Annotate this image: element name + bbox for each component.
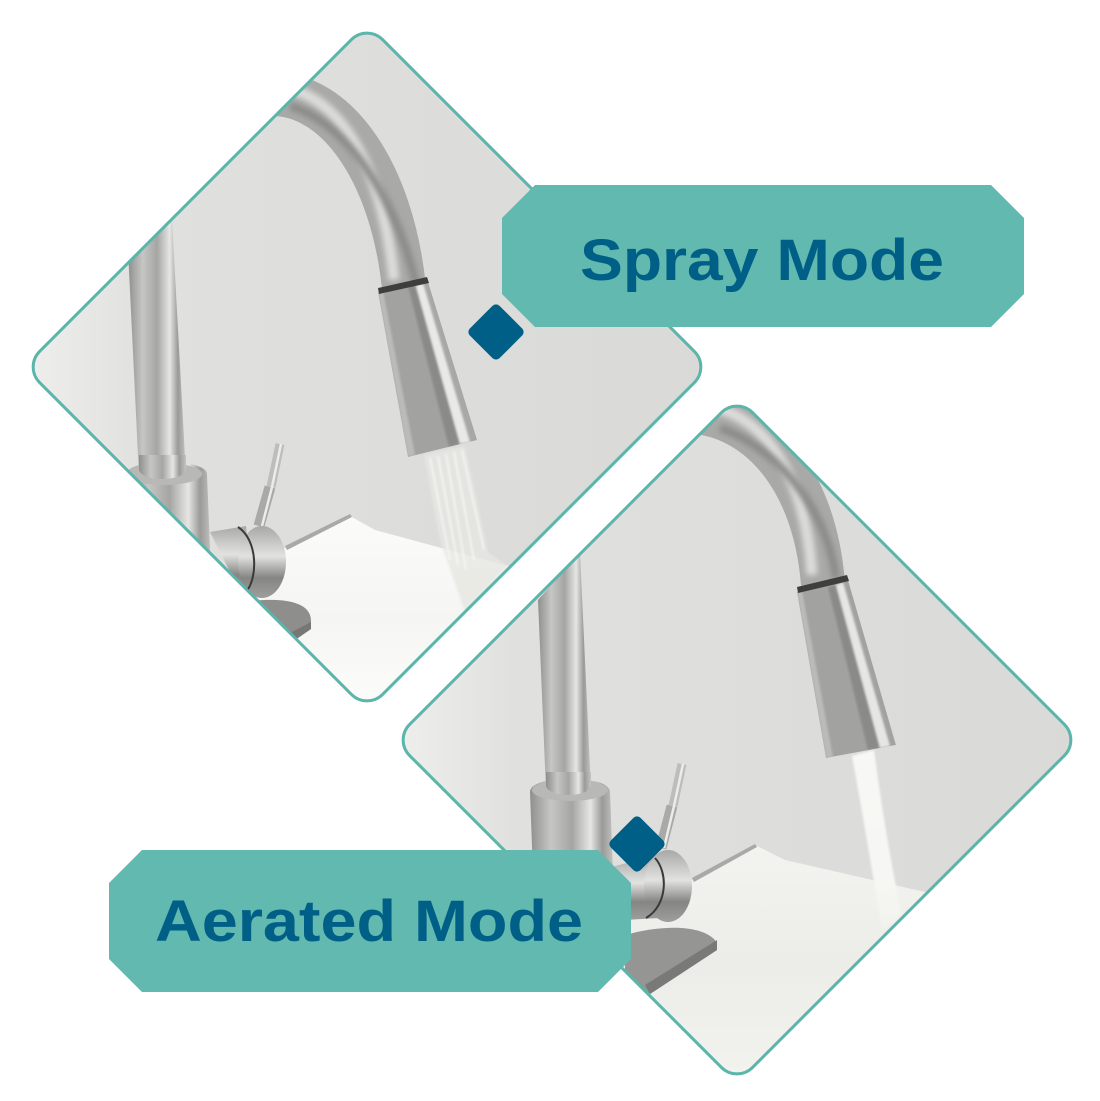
sink basin bbox=[620, 846, 930, 1080]
photo: faucet with spray stream bbox=[34, 34, 700, 662]
panel: aerated mode photo bbox=[390, 390, 1090, 1090]
marker: aerated mode bbox=[607, 814, 667, 874]
faucet base bbox=[530, 781, 613, 864]
mixer lever bbox=[259, 444, 281, 526]
spout arc bbox=[270, 94, 404, 288]
sink basin bbox=[256, 517, 508, 700]
nozzle bbox=[378, 282, 477, 457]
label: spray mode bbox=[502, 185, 1024, 327]
photo border bbox=[394, 397, 1080, 1083]
nozzle bbox=[797, 580, 896, 758]
deck plate bbox=[625, 928, 717, 994]
deck plate bbox=[259, 600, 311, 638]
spout arc bbox=[695, 412, 823, 584]
spray stream bbox=[424, 446, 508, 612]
marker: spray mode bbox=[466, 302, 526, 362]
faucet stem bbox=[128, 220, 186, 476]
mixer body bbox=[615, 856, 660, 920]
mixer body bbox=[210, 526, 247, 584]
faucet stem bbox=[538, 552, 591, 790]
photo border bbox=[24, 24, 710, 710]
aerated stream bbox=[852, 750, 896, 886]
panel: spray mode photo bbox=[20, 20, 720, 720]
faucet base bbox=[130, 464, 210, 551]
mixer lever bbox=[661, 764, 683, 848]
heading: aerated mode: Aerated Mode bbox=[155, 889, 583, 954]
heading: spray mode: Spray Mode bbox=[580, 228, 944, 293]
photo: faucet with aerated stream bbox=[390, 390, 1090, 1090]
label: aerated mode bbox=[109, 850, 631, 992]
